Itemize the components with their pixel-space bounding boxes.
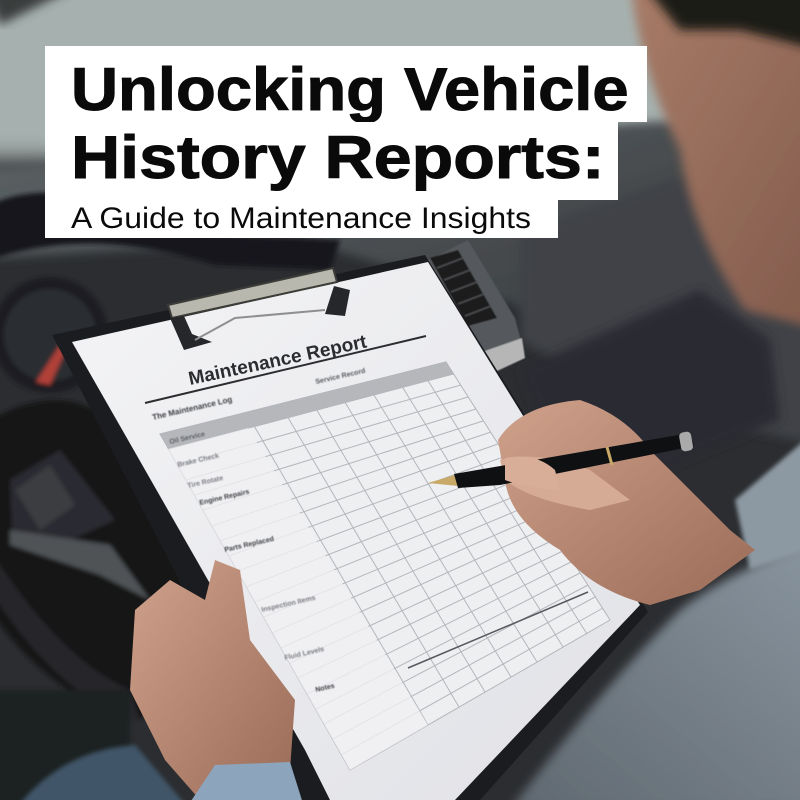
left hand holding clipboard — [130, 560, 295, 800]
air vent — [425, 240, 525, 372]
blurry report row labels — [151, 368, 366, 694]
blurry report row labels: Service Record — [315, 368, 366, 386]
blurry report row labels: Oil Service — [169, 431, 206, 446]
blurry report row labels: Notes — [315, 683, 336, 694]
steering wheel — [0, 193, 340, 800]
report heading: Maintenance Report — [187, 331, 369, 390]
clipboard clip — [168, 268, 350, 350]
subtitle: A Guide to Maintenance Insights — [71, 202, 531, 235]
left shirt cuff — [185, 762, 305, 800]
man's shirt — [510, 530, 800, 800]
right hand holding pen — [428, 400, 755, 605]
icon: pen — [428, 431, 694, 488]
report paper — [72, 262, 640, 800]
hair — [640, 0, 800, 55]
man's head — [630, 0, 800, 335]
title line 1: Unlocking Vehicle — [71, 56, 629, 122]
blurry report row labels: Brake Check — [177, 453, 220, 469]
blurry report row labels: Fluid Levels — [284, 646, 325, 662]
blurry report row labels: Parts Replaced — [224, 536, 275, 554]
blurry report row labels: Inspection Items — [261, 595, 316, 614]
blurry report row labels: Tire Rotate — [187, 475, 224, 490]
blurry report row labels: Engine Repairs — [199, 489, 250, 507]
report table — [160, 362, 610, 770]
title line 2: History Reports: — [71, 124, 605, 191]
clipboard board — [52, 255, 648, 800]
jeans — [15, 745, 190, 800]
blurry report row labels: The Maintenance Log — [151, 395, 233, 422]
